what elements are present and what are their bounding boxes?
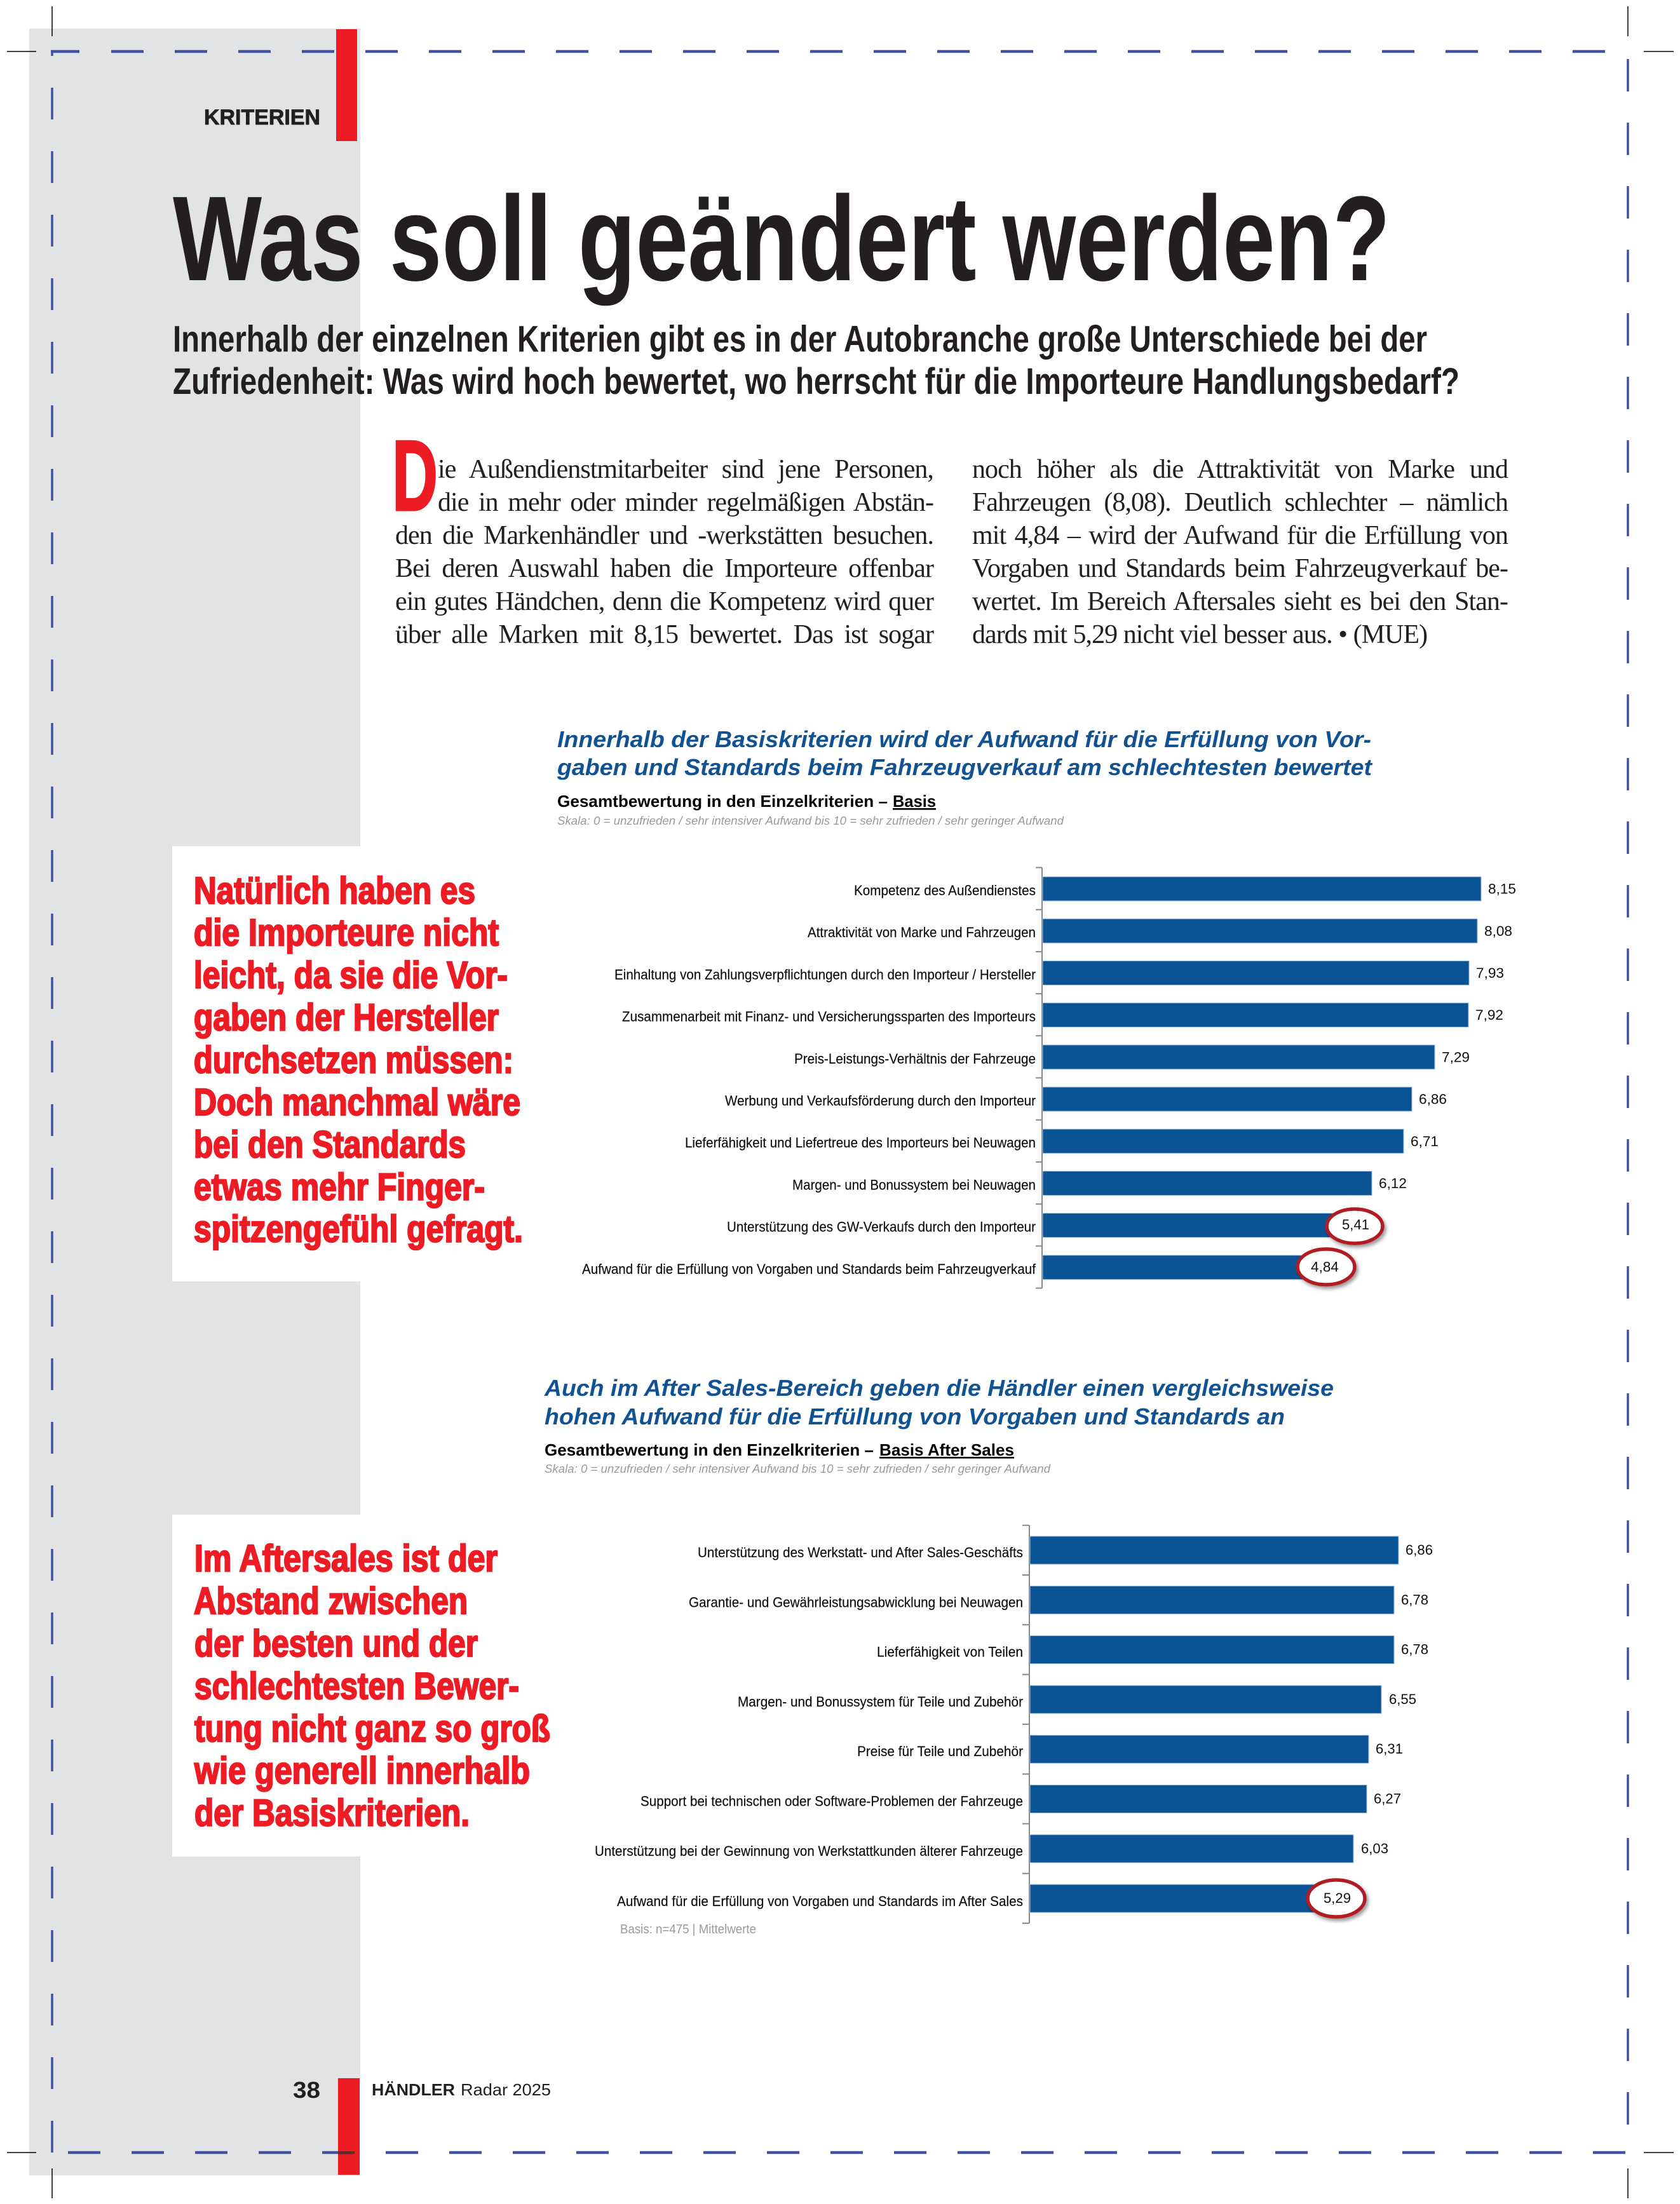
body text column 1: ie Außendienstmitarbeiter sind jene Personen, <box>438 455 933 484</box>
callout 2: tung nicht ganz so groß <box>194 1708 550 1750</box>
bar chart 1: Unterstützung des GW-Verkaufs durch den Importeur <box>727 1219 1036 1235</box>
chart 2 title: hohen Aufwand für die Erfüllung von Vorgaben und Standards an <box>545 1403 1285 1430</box>
callout 1: etwas mehr Finger- <box>194 1166 485 1208</box>
subheading: Innerhalb der einzelnen Kriterien gibt es in der Autobranche große Unterschiede bei der <box>173 319 1427 360</box>
bar chart 2: 6,03 <box>1361 1841 1388 1856</box>
subheading <box>173 319 1460 402</box>
body text column 2: Vorgaben und Standards beim Fahrzeugverkauf be- <box>972 554 1508 583</box>
red bar top <box>336 29 357 141</box>
section label: KRITERIEN <box>204 105 320 130</box>
bar chart 1: Lieferfähigkeit und Liefertreue des Importeurs bei Neuwagen <box>685 1135 1036 1151</box>
bar chart 2: Unterstützung bei der Gewinnung von Werkstattkunden älterer Fahrzeuge <box>595 1843 1023 1859</box>
bar chart 1: Attraktivität von Marke und Fahrzeugen <box>808 924 1036 940</box>
chart 1 title: Innerhalb der Basiskriterien wird der Aufwand für die Erfüllung von Vor- <box>557 726 1371 752</box>
callout 2: der Basiskriterien. <box>194 1792 470 1834</box>
bar chart 2: Unterstützung des Werkstatt- und After Sales-Geschäfts <box>698 1545 1023 1560</box>
highlight circle 5,29 <box>1308 1880 1365 1917</box>
callout 2: schlechtesten Bewer- <box>194 1665 519 1707</box>
bar chart 2: 6,27 <box>1374 1790 1401 1807</box>
chart 2 subtitle: Basis After Sales <box>879 1440 1014 1459</box>
callout 1: bei den Standards <box>194 1123 466 1165</box>
highlight circle 4,84: 4,84 <box>1311 1259 1339 1274</box>
callout 2: Abstand zwischen <box>194 1580 468 1622</box>
callout 2: Im Aftersales ist der <box>194 1538 498 1579</box>
bar chart 1: 7,93 <box>1476 965 1504 981</box>
callout 1: durchsetzen müssen: <box>194 1039 513 1081</box>
bar chart 1: Zusammenarbeit mit Finanz- und Versicherungssparten des Importeurs <box>622 1009 1036 1025</box>
bar chart 1: Margen- und Bonussystem bei Neuwagen <box>792 1177 1036 1193</box>
chart 2 subtitle <box>545 1440 1014 1459</box>
callout 1: Doch manchmal wäre <box>194 1081 520 1123</box>
body text column 1: Bei deren Auswahl haben die Importeure offenbar <box>395 554 933 583</box>
bar chart 1 <box>582 868 1516 1288</box>
highlight circle 5,41: 5,41 <box>1342 1217 1369 1233</box>
body text column 2: dards mit 5,29 nicht viel besser aus. • (MUE) <box>972 620 1427 649</box>
chart 1 subtitle: Basis <box>893 792 936 811</box>
body text column 1: die in mehr oder minder regelmäßigen Abstän- <box>438 488 933 517</box>
callout 1: Natürlich haben es <box>194 870 475 912</box>
bar chart 1: 8,08 <box>1484 923 1512 939</box>
footer publication name: HÄNDLER <box>372 2080 455 2099</box>
bar chart 1: Aufwand für die Erfüllung von Vorgaben und Standards beim Fahrzeugverkauf <box>582 1261 1036 1277</box>
highlight circle 5,41 <box>1327 1209 1383 1243</box>
bar chart 1: 7,92 <box>1475 1007 1503 1023</box>
highlight circle 5,29: 5,29 <box>1324 1890 1351 1906</box>
bar chart 1: Einhaltung von Zahlungsverpflichtungen durch den Importeur / Hersteller <box>614 966 1036 982</box>
grey side panel <box>29 29 360 2175</box>
callout 2: wie generell innerhalb <box>194 1750 530 1792</box>
bar chart 1: 6,12 <box>1379 1175 1407 1191</box>
callout 1: spitzengefühl gefragt. <box>194 1208 523 1250</box>
body text column 2: wertet. Im Bereich Aftersales sieht es bei den Stan- <box>972 587 1508 616</box>
bar chart 2: Margen- und Bonussystem für Teile und Zubehör <box>738 1694 1023 1710</box>
bar chart 1: 7,29 <box>1442 1049 1470 1065</box>
red bar bottom <box>338 2078 360 2175</box>
chart 2 title: Auch im After Sales-Bereich geben die Händler einen vergleichsweise <box>544 1375 1334 1401</box>
body text column 2: mit 4,84 – wird der Aufwand für die Erfüllung von <box>972 521 1508 550</box>
drop cap: D <box>392 420 438 532</box>
bar chart 2: 6,55 <box>1389 1691 1416 1707</box>
callout 1 <box>172 846 523 1281</box>
chart base note: Basis: n=475 | Mittelwerte <box>620 1923 756 1937</box>
page number: 38 <box>293 2077 320 2103</box>
bar chart 2: Garantie- und Gewährleistungsabwicklung bei Neuwagen <box>689 1594 1023 1610</box>
callout 1: die Importeure nicht <box>194 912 499 954</box>
bar chart 1: 6,86 <box>1419 1092 1447 1107</box>
bar chart 2: 6,78 <box>1401 1642 1428 1658</box>
bar chart 2: 6,31 <box>1376 1741 1403 1757</box>
chart 2 subtitle: Gesamtbewertung in den Einzelkriterien – <box>545 1440 874 1459</box>
highlight circle 4,84 <box>1297 1249 1355 1285</box>
chart 1 scale note: Skala: 0 = unzufrieden / sehr intensiver Aufwand bis 10 = sehr zufrieden / sehr geringer Aufwand <box>557 815 1064 827</box>
callout 1: gaben der Hersteller <box>194 996 499 1038</box>
bar chart 1: 8,15 <box>1488 881 1516 897</box>
chart 1 subtitle: Gesamtbewertung in den Einzelkriterien – <box>557 792 888 811</box>
bar chart 1: Kompetenz des Außendienstes <box>854 882 1036 898</box>
body text column 2: noch höher als die Attraktivität von Marke und <box>972 455 1508 484</box>
body text column 2: Fahrzeugen (8,08). Deutlich schlechter – nämlich <box>972 488 1508 517</box>
bar chart 2: Preise für Teile und Zubehör <box>857 1743 1023 1759</box>
chart 1 title: gaben und Standards beim Fahrzeugverkauf am schlechtesten bewertet <box>557 754 1373 780</box>
bar chart 1: Preis-Leistungs-Verhältnis der Fahrzeuge <box>794 1051 1036 1067</box>
body text column 2 <box>972 455 1508 649</box>
bar chart 2: 6,78 <box>1401 1592 1428 1607</box>
callout 2: der besten und der <box>194 1623 478 1665</box>
footer publication name: Radar 2025 <box>461 2080 551 2099</box>
bar chart 1: Werbung und Verkaufsförderung durch den Importeur <box>725 1093 1036 1109</box>
body text column 1: den die Markenhändler und -werkstätten besuchen. <box>395 521 933 550</box>
callout 2 <box>172 1515 553 1856</box>
body text column 1: ein gutes Händchen, denn die Kompetenz wird quer <box>395 587 933 616</box>
chart 2 scale note: Skala: 0 = unzufrieden / sehr intensiver Aufwand bis 10 = sehr zufrieden / sehr geringer Aufwand <box>545 1463 1051 1475</box>
bar chart 2: Support bei technischen oder Software-Problemen der Fahrzeuge <box>640 1793 1023 1809</box>
body text column 1 <box>395 455 934 649</box>
bar chart 2 <box>595 1525 1433 1923</box>
bar chart 2: Aufwand für die Erfüllung von Vorgaben und Standards im After Sales <box>617 1893 1023 1909</box>
footer publication name <box>372 2080 551 2099</box>
callout 1: leicht, da sie die Vor- <box>194 954 508 996</box>
bar chart 1: 6,71 <box>1411 1133 1439 1149</box>
chart 1 title <box>557 726 1373 780</box>
bar chart 2: 6,86 <box>1406 1542 1433 1558</box>
chart 2 title <box>544 1375 1334 1430</box>
bar chart 2: Lieferfähigkeit von Teilen <box>877 1644 1023 1660</box>
body text column 1: über alle Marken mit 8,15 bewertet. Das ist sogar <box>395 620 933 649</box>
